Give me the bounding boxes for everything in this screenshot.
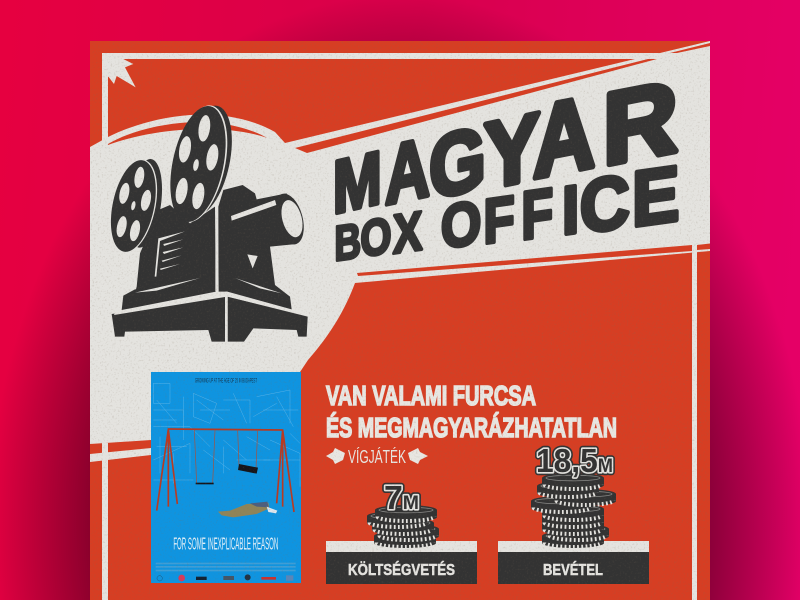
lens opening [278, 198, 306, 240]
movie title [326, 380, 617, 443]
title: MAGYAR: R [603, 60, 678, 188]
projector body [112, 185, 309, 342]
title: MAGYAR: A [533, 75, 595, 200]
small film reel [103, 156, 167, 256]
value: 7M: 7M [384, 479, 419, 516]
decorative red stripes [90, 43, 710, 454]
icon: right arrow [408, 448, 428, 464]
revenue base bar [498, 541, 649, 584]
title: MAGYAR: Y [484, 94, 540, 210]
icon: left arrow [326, 448, 345, 464]
subtitle: BOX OFFICE: E [632, 149, 679, 243]
title: MAGYAR [333, 60, 678, 230]
movie poster [151, 372, 301, 583]
movie title: VAN VALAMI FURCSA [326, 380, 536, 411]
poster city sketch [153, 383, 300, 487]
subtitle: BOX OFFICE: O [360, 206, 392, 268]
revenue stack: coins [531, 473, 616, 548]
body highlights [114, 200, 290, 342]
subtitle: BOX OFFICE: F [483, 183, 515, 258]
lower left frame line [102, 443, 108, 600]
big film reel [161, 100, 241, 227]
budget stack: coins [367, 505, 439, 548]
subtitle: BOX OFFICE: F [521, 173, 553, 254]
panel: cream header shape [90, 41, 710, 462]
poster credits [156, 563, 296, 571]
poster logos [157, 574, 293, 581]
panel: red poster background [90, 41, 710, 600]
title: MAGYAR: M [333, 135, 382, 230]
budget base bar [326, 541, 477, 584]
icon: film projector [103, 100, 309, 342]
revenue base bar: BEVÉTEL [543, 562, 603, 579]
subtitle: BOX OFFICE [334, 149, 679, 272]
paper grain overlay [90, 41, 710, 600]
budget base bar: KÖLTSÉGVETÉS [348, 562, 455, 579]
movie title: ÉS MEGMAGYARÁZHATATLAN [326, 412, 617, 443]
swing seats [196, 464, 258, 484]
genre label with arrows: VÍGJÁTÉK [348, 447, 406, 467]
subtitle: BOX OFFICE: X [393, 200, 422, 265]
movie poster: GROWING UP AT THE AGE OF 25 IN BUDAPEST [195, 378, 257, 385]
subtitle: BOX OFFICE: C [580, 159, 630, 250]
value: 18,5M: 18,5M [536, 442, 613, 479]
subtitle: BOX OFFICE: O [441, 188, 481, 262]
value: 7M: 7M [384, 479, 419, 516]
value: 18,5M: 18,5M [536, 442, 613, 479]
fallen figure [218, 502, 277, 517]
icon: corner burst [102, 53, 136, 87]
subtitle: BOX OFFICE: B [334, 213, 361, 272]
title: MAGYAR: G [429, 108, 486, 218]
frame lines [102, 53, 697, 600]
title: MAGYAR: A [385, 120, 430, 222]
infographic canvas: FOR SOME INEXPLICABLE REASON [173, 533, 278, 553]
subtitle: BOX OFFICE: I [562, 171, 579, 249]
swing set [157, 429, 294, 512]
